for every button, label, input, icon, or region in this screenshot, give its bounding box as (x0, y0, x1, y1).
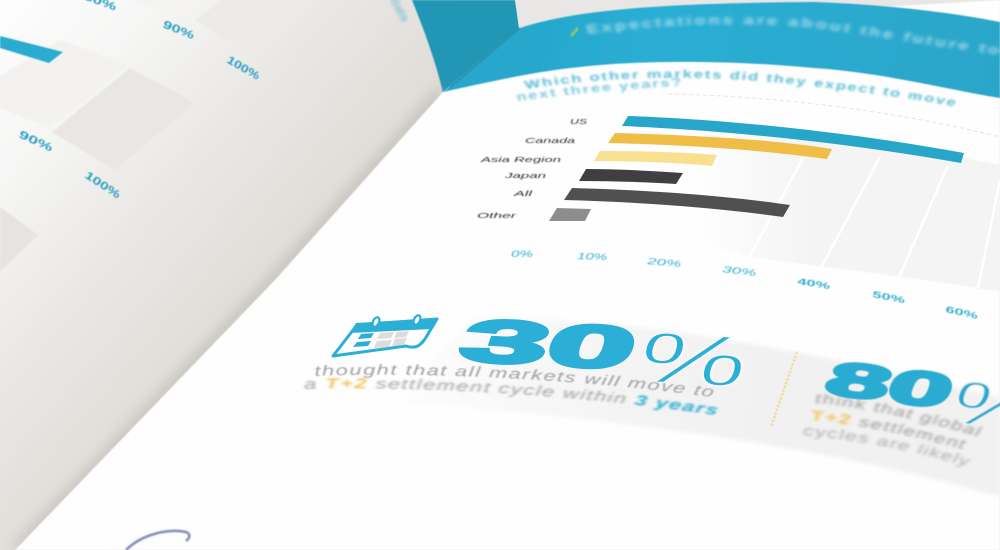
category labels: All (512, 189, 533, 198)
chart grid columns (690, 125, 1000, 292)
axis labels (511, 249, 979, 321)
bar: Asia Region (594, 151, 717, 166)
axis labels: 10% (577, 251, 607, 262)
stats band (400, 318, 1000, 497)
axis labels: 50% (872, 289, 906, 305)
bar: All (564, 188, 790, 217)
category labels: Canada (525, 136, 575, 145)
logo fragment (126, 531, 189, 550)
yellow band marker (571, 28, 578, 36)
left page axis labels: 100% (224, 54, 262, 83)
left page axis labels (17, 0, 262, 201)
stat description: thought that all markets will move to (315, 364, 714, 397)
stat: 80% (802, 352, 1000, 468)
big number 80: 80 (818, 352, 961, 418)
percent sign: % (628, 318, 759, 402)
stat description: T+2 settlement (810, 408, 967, 450)
bar: Other (549, 208, 591, 221)
axis labels: 0% (511, 249, 533, 259)
bar chart (477, 116, 1000, 321)
category labels: Asia Region (479, 155, 561, 164)
left page axis labels: 90% (161, 19, 196, 42)
chart heading: next three years? (516, 76, 682, 102)
stat description (802, 393, 984, 468)
gutter shadow (18, 92, 443, 550)
bar: Japan (579, 169, 683, 184)
left page blue band (412, 0, 522, 93)
left page blue bar (0, 36, 63, 63)
axis labels: 30% (722, 264, 757, 278)
category labels: Other (477, 211, 517, 220)
axis labels: 40% (797, 276, 831, 291)
blue header band (443, 1, 1000, 99)
stat description: a T+2 settlement cycle within 3 years (303, 376, 720, 416)
left page chart panels (0, 0, 315, 272)
left page axis labels: 90% (17, 129, 55, 155)
category labels (477, 117, 587, 220)
axis labels: 20% (645, 256, 682, 269)
paper behind right page top (515, 0, 1000, 36)
bar: Canada (608, 133, 832, 159)
big number 30: 30 (452, 307, 646, 382)
dotted divider (771, 352, 797, 427)
icon: calendar (333, 314, 438, 356)
stat description: cycles are likely (802, 427, 971, 468)
stat description: think that global (814, 393, 984, 437)
axis labels: 60% (945, 304, 979, 321)
chart heading: Which other markets did they expect to move (522, 68, 957, 108)
left page axis labels: 100% (82, 169, 123, 201)
band fold line (450, 28, 520, 87)
dashed heading rule (668, 94, 1000, 137)
bar: US (622, 116, 964, 163)
stat: 30% (303, 307, 759, 416)
category labels: US (570, 117, 587, 126)
category labels: Japan (503, 171, 546, 180)
